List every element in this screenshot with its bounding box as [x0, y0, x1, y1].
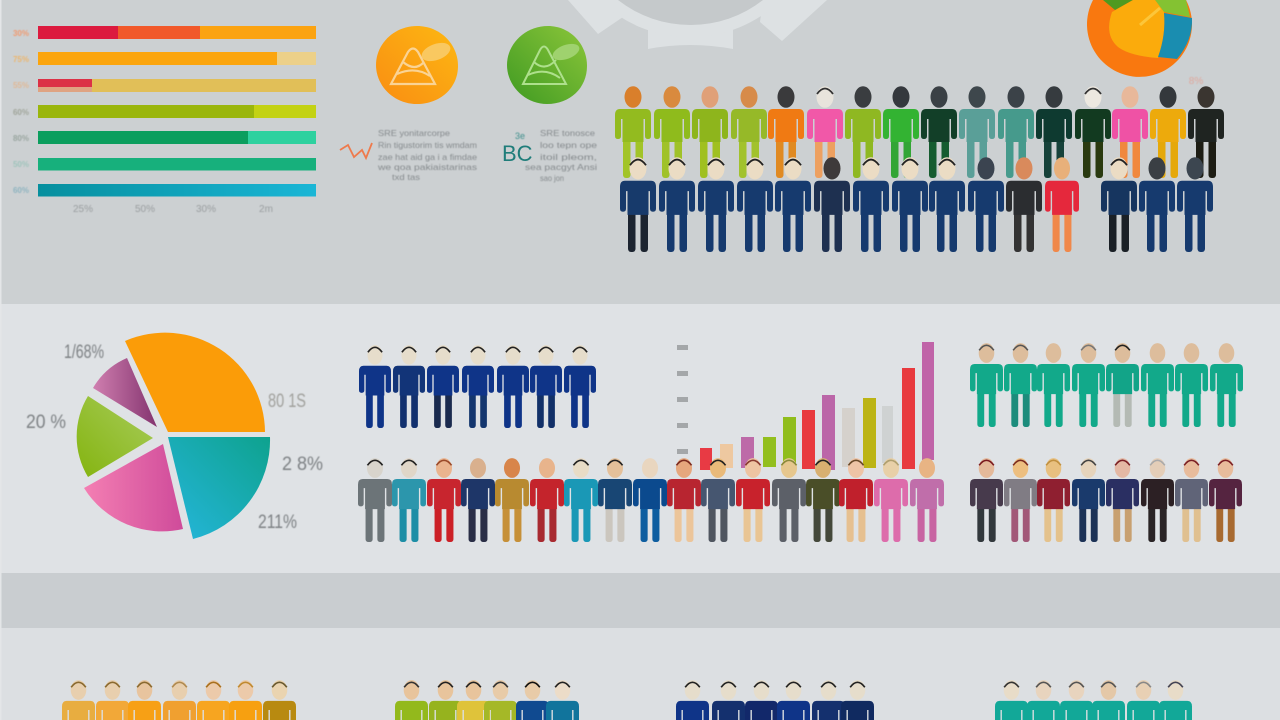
bar 5: [38, 131, 316, 144]
icon: BC mark: BC: [502, 141, 533, 166]
text block: second note: loo tepn ope: [540, 140, 597, 150]
bar 6: [38, 158, 316, 170]
column chart: [677, 342, 934, 470]
slice: green: [77, 396, 153, 477]
bar 4: [38, 105, 316, 118]
text block: first note: txd tas: [392, 172, 420, 182]
text block: second note: [525, 128, 597, 183]
people group: middle blue row: [359, 345, 596, 428]
people group: top back row: [615, 86, 1224, 178]
background band: top panel: [0, 0, 1280, 304]
gear graphic: [568, 0, 827, 49]
slice: orange: [125, 333, 265, 432]
people group: middle mixed row: [358, 458, 944, 542]
text block: first note: we qoa pakiaistarinas: [377, 162, 477, 172]
people group: middle teal row: [970, 343, 1243, 427]
pie labels: 80 1S: [268, 391, 306, 412]
icon: zigzag line: [340, 143, 372, 158]
pie labels: 1/68%: [64, 342, 104, 363]
text block: second note: SRE tonosce: [540, 128, 595, 138]
bar value labels: 75%: [13, 55, 29, 64]
people group: bottom orange row: [62, 680, 296, 720]
bar axis labels: 2m: [259, 204, 273, 215]
people group: bottom blue row: [676, 680, 874, 720]
background band: bottom panel: [0, 628, 1280, 720]
bar value labels: 55%: [13, 81, 29, 90]
text block: second note: sea pacgyt Ansi: [525, 162, 597, 172]
bar 2: [38, 52, 316, 65]
bar value labels: 30%: [13, 29, 29, 38]
slice: teal: [168, 437, 270, 539]
bar 1: [38, 26, 316, 39]
pie chart: [26, 333, 323, 539]
bar axis labels: 25%: [73, 204, 93, 215]
people group: middle dark row: [970, 458, 1242, 542]
small donut chart: [1087, 0, 1203, 87]
axis ticks: [677, 345, 688, 454]
bar value labels: 50%: [13, 160, 29, 169]
bar axis labels: 50%: [135, 204, 155, 215]
pie labels: [26, 342, 323, 533]
bar value labels: [13, 29, 29, 195]
slice: pink: [84, 444, 183, 531]
text block: first note: Rin tigustorim tis wmdam: [378, 140, 477, 150]
pie labels: 20 %: [26, 412, 66, 433]
background band: middle panel: [0, 304, 1280, 573]
bar axis labels: [73, 204, 273, 215]
horizontal bar chart: [13, 26, 316, 215]
bar value labels: 60%: [13, 186, 29, 195]
text block: first note: [377, 128, 477, 182]
text block: second note: sao jon: [540, 173, 564, 183]
background band: divider strip: [0, 573, 1280, 628]
slice: purple: [93, 358, 157, 427]
people group: top front row: [620, 157, 1213, 252]
people group: bottom green row: [395, 680, 579, 720]
text block: second note: itoil pleom,: [540, 152, 597, 162]
bar 7: [38, 184, 316, 196]
pie labels: 211%: [258, 512, 297, 533]
people group: bottom teal row: [995, 680, 1192, 720]
icon: BC mark: 3e: [515, 131, 525, 141]
bar 3: [38, 79, 316, 92]
bar value labels: 80%: [13, 134, 29, 143]
pie labels: 2 8%: [282, 454, 323, 475]
bar value labels: 60%: [13, 108, 29, 117]
icon: orange circle badge: [376, 26, 458, 104]
bar axis labels: 30%: [196, 204, 216, 215]
icon: green circle badge: [507, 26, 587, 104]
small label: 8%: [1189, 76, 1203, 87]
text block: first note: zae hat aid ga i a fimdae: [378, 152, 477, 162]
text block: first note: SRE yonitarcorpe: [378, 128, 450, 138]
